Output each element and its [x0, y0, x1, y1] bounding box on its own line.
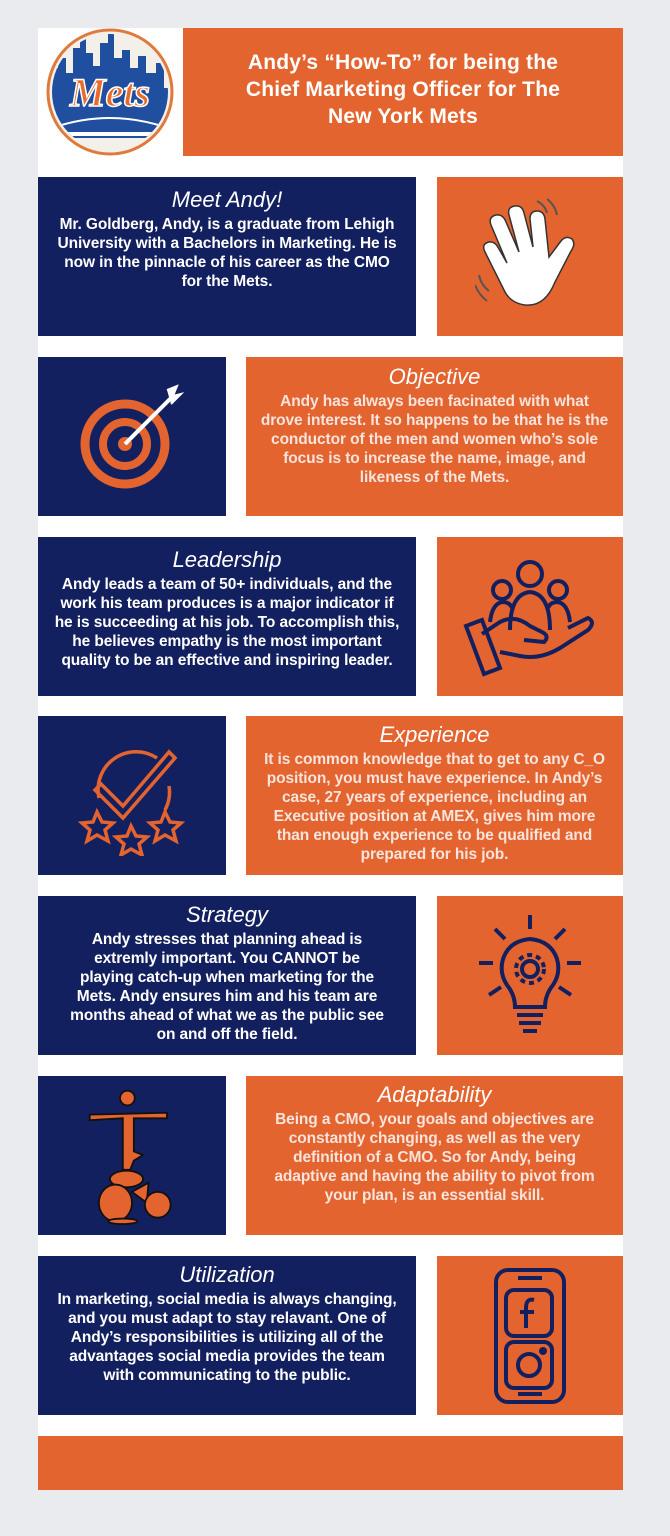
panel: Utilization: advantages social media provides the team	[69, 1348, 385, 1365]
panel: Strategy: playing catch-up when marketing for the	[80, 969, 374, 986]
title: New York Mets	[328, 104, 478, 128]
panel: Utilization: In marketing, social media is always changing,	[57, 1291, 397, 1308]
panel: Objective: conductor of the men and women who’s sole	[271, 431, 598, 448]
panel: Adaptability: adaptive and having the ability to pivot from	[274, 1168, 595, 1185]
panel: Meet Andy: for the Mets.	[182, 273, 272, 290]
panel: Strategy: months ahead of what we as the public see	[70, 1007, 384, 1024]
panel: Objective	[246, 357, 623, 516]
icon: check with stars	[38, 716, 226, 875]
panel: Experience: Executive position at AMEX, gives him more	[274, 808, 595, 825]
icon: waving hand	[437, 177, 623, 336]
logo: Mets	[46, 28, 174, 156]
icon: lightbulb	[437, 896, 623, 1055]
icon: balancing figure	[38, 1076, 226, 1235]
panel: Objective: likeness of the Mets.	[360, 469, 509, 486]
title: Chief Marketing Officer for The	[246, 78, 560, 100]
footer bar	[38, 1436, 623, 1490]
panel: Leadership: Leadership	[173, 547, 281, 572]
panel: Meet Andy: University with a Bachelors in Marketing. He is	[58, 235, 396, 252]
panel: Utilization: with communicating to the public.	[103, 1367, 351, 1384]
icon: hand holding team	[437, 537, 623, 696]
panel: Strategy: Strategy	[186, 902, 268, 927]
panel: Adaptability: your plan, is an essential skill.	[325, 1187, 544, 1204]
panel: Utilization	[38, 1256, 416, 1415]
panel: Meet Andy: now in the pinnacle of his career as the CMO	[64, 254, 390, 271]
panel: Strategy: extremly important. You CANNOT be	[94, 950, 360, 967]
panel: Meet Andy: Meet Andy!	[172, 187, 282, 212]
panel: Experience: Experience	[379, 722, 490, 747]
panel: Objective: Andy has always been facinated with what	[280, 393, 589, 410]
panel: Adaptability: definition of a CMO. So for Andy, being	[293, 1149, 576, 1166]
icon: phone with social media	[437, 1256, 623, 1415]
panel: Adaptability: constantly changing, as well as the very	[289, 1130, 580, 1147]
panel: Leadership: he believes empathy is the most important	[72, 633, 382, 650]
panel: Leadership: he is succeeding at his job. To accomplish this,	[55, 614, 399, 631]
panel: Meet Andy: Mr. Goldberg, Andy, is a graduate from Lehigh	[60, 216, 394, 233]
panel: Strategy: Andy stresses that planning ahead is	[92, 931, 362, 948]
panel: Strategy: on and off the field.	[157, 1026, 297, 1043]
panel: Experience: position, you must have experience. In Andy’s	[267, 770, 602, 787]
panel: Utilization: Utilization	[179, 1262, 275, 1287]
panel: Strategy: Mets. Andy ensures him and his team are	[77, 988, 377, 1005]
panel: Utilization: and you must adapt to stay relavant. One of	[68, 1310, 386, 1327]
panel: Utilization: Andy’s responsibilities is utilizing all of the	[71, 1329, 383, 1346]
panel: Experience: than enough experience to be qualified and	[277, 827, 592, 844]
panel: Adaptability: Being a CMO, your goals and objectives are	[275, 1111, 594, 1128]
panel: Objective: focus is to increase the name, image, and	[283, 450, 586, 467]
icon: target	[38, 357, 226, 516]
panel: Experience	[246, 716, 623, 875]
panel: Leadership	[38, 537, 416, 696]
panel: Experience: case, 27 years of experience, including an	[282, 789, 587, 806]
panel: Meet Andy	[38, 177, 416, 336]
title: Andy’s “How-To” for being the	[248, 50, 558, 74]
title	[183, 28, 623, 156]
panel: Experience: It is common knowledge that to get to any C_O	[264, 751, 605, 768]
panel: Objective: drove interest. It so happens to be that he is the	[261, 412, 608, 429]
panel: Experience: prepared for his job.	[361, 846, 508, 863]
logo: Mets: Mets	[69, 70, 150, 115]
panel: Objective: Objective	[389, 364, 480, 389]
panel: Leadership: work his team produces is a major indicator if	[60, 595, 394, 612]
panel: Adaptability: Adaptability	[378, 1082, 491, 1107]
panel: Leadership: Andy leads a team of 50+ individuals, and the	[62, 576, 392, 593]
panel: Strategy	[38, 896, 416, 1055]
panel: Adaptability	[246, 1076, 623, 1235]
panel: Leadership: quality to be an effective and inspiring leader.	[61, 652, 393, 669]
